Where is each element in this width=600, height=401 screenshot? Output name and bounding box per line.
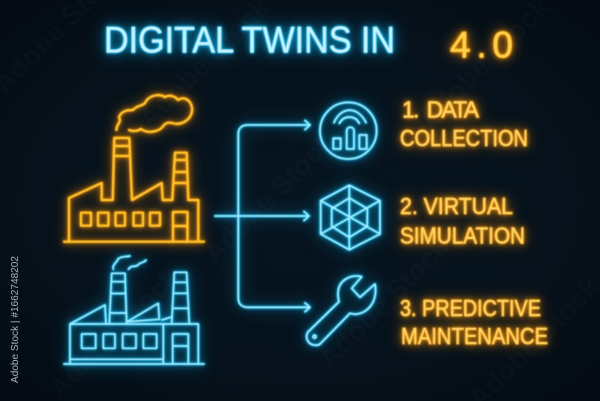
label: virtual simulation: SIMULATION	[400, 222, 525, 248]
chimney bands	[110, 282, 188, 313]
arrow: to data collection	[238, 120, 310, 216]
door	[173, 212, 188, 242]
door	[173, 334, 188, 364]
watermark: stock overlay text: Adobe Stock	[42, 261, 186, 401]
chimney bands	[114, 146, 188, 183]
icon: data collection	[320, 102, 377, 159]
watermark: stock overlay text: Adobe Stock	[197, 126, 341, 269]
smoke cloud	[116, 95, 192, 132]
windows	[81, 213, 160, 226]
arrow: to predictive maintenance	[238, 216, 310, 312]
bars	[333, 127, 367, 149]
icon: physical factory (orange)	[64, 95, 204, 242]
arrow: to virtual simulation	[215, 212, 309, 220]
arrows: flow to three outcomes	[215, 120, 310, 312]
label: virtual simulation: 2. VIRTUAL	[400, 193, 513, 219]
label: predictive maintenance	[400, 295, 548, 349]
icon: predictive maintenance wrench	[307, 276, 376, 345]
label: predictive maintenance: 3. PREDICTIVE	[400, 295, 541, 321]
label: predictive maintenance: MAINTENANCE	[401, 323, 548, 349]
signal arcs	[334, 110, 366, 123]
watermark: stock overlay text: Adobe Stock	[312, 231, 456, 374]
icon: digital twin factory (blue)	[64, 256, 204, 364]
label: data collection	[400, 96, 528, 151]
title: 4.0: 4.0	[450, 24, 513, 66]
title: digital twins in: DIGITAL TWINS IN	[104, 20, 395, 60]
factory outline	[64, 138, 204, 242]
windows	[82, 334, 157, 348]
title	[104, 20, 513, 66]
label: virtual simulation	[400, 193, 525, 248]
twin outline	[64, 272, 204, 364]
icon: virtual simulation wireframe hexagon	[321, 185, 380, 250]
side credit text: Adobe Stock | #1662748202	[9, 256, 21, 383]
labels: three outcomes	[400, 96, 548, 349]
smoke wisps	[113, 256, 146, 269]
label: data collection: COLLECTION	[400, 125, 528, 151]
label: data collection: 1. DATA	[402, 96, 480, 122]
partition and base	[70, 324, 163, 364]
